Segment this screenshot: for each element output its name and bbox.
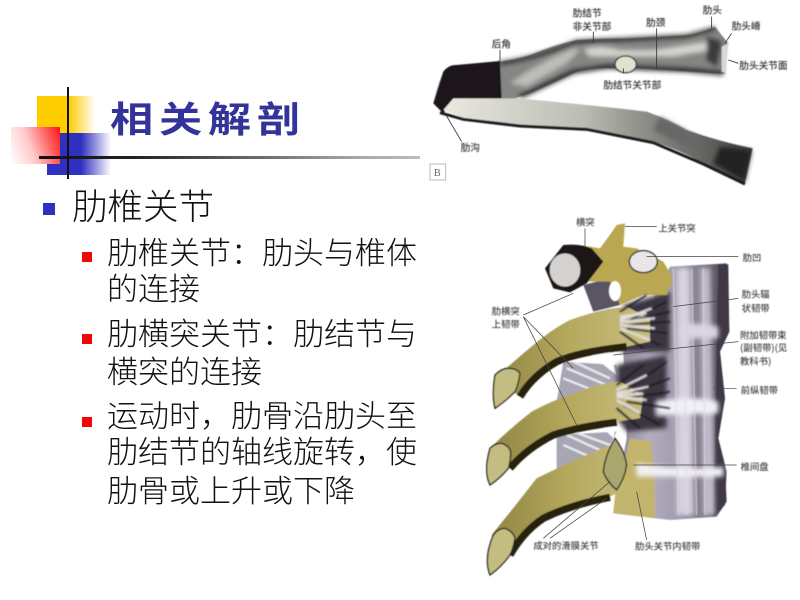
bullet list [82, 228, 417, 511]
joint labels: 前纵韧带 [741, 382, 778, 396]
rib labels: 肋头关节面 [739, 58, 788, 72]
rib 1 [495, 307, 650, 397]
rib labels: 肋颈 [646, 15, 666, 29]
vertebra yellow lower part [613, 438, 655, 518]
rib cut ends [493, 368, 520, 408]
rib labels: 肋头 [703, 2, 722, 16]
leader lines [445, 17, 738, 142]
bullet list: 肋椎关节：肋头与椎体 [107, 228, 417, 273]
joint labels: 上关节突 [658, 221, 696, 235]
joint labels: 肋凹 [743, 250, 761, 264]
joint labels: 肋横突 [492, 303, 520, 317]
bullet list: 肋骨或上升或下降 [107, 466, 355, 511]
rib 3 [492, 445, 627, 555]
joint labels: 肋头辐 [742, 287, 770, 301]
panel label B [430, 164, 446, 180]
joint labels: 肋头关节内韧带 [635, 539, 700, 553]
joint labels: 状韧带 [742, 301, 770, 315]
vertebra arch [545, 223, 673, 305]
joint labels: (副韧带)(见 [740, 340, 787, 354]
figure: rib [430, 2, 788, 184]
ligaments between ribs [557, 362, 620, 472]
rib labels: 肋结节关节部 [603, 77, 662, 91]
rib labels: 肋结节 [573, 6, 602, 20]
panel label B: B [434, 168, 441, 179]
radiate ligaments [617, 295, 670, 428]
vertebral body [613, 263, 729, 520]
joint labels [492, 215, 787, 553]
rib labels [461, 2, 788, 154]
joint labels: 横突 [576, 215, 595, 229]
rib labels: 非关节部 [573, 19, 612, 33]
rib lower part [443, 98, 753, 183]
bullet: main [43, 203, 55, 215]
bullet list: 肋横突关节：肋结节与 [107, 309, 417, 354]
leader lines [523, 227, 738, 540]
rib labels: 肋头嵴 [732, 18, 761, 32]
rib labels: 后角 [492, 37, 511, 51]
figure: costovertebral joints [487, 215, 787, 575]
bullet list: 运动时，肋骨沿肋头至 [107, 391, 417, 436]
decorative logo: coloured squares and lines [11, 87, 420, 179]
title: 相关解剖 [110, 91, 306, 143]
rib upper part [433, 27, 728, 113]
rib 2 [490, 382, 643, 468]
heading: 肋椎关节: 肋椎关节 [72, 179, 214, 230]
joint labels: 附加韧带束 [740, 327, 787, 341]
bullet list: 肋结节的轴线旋转，使 [107, 427, 417, 472]
joint labels: 椎间盘 [741, 459, 769, 473]
bullet list: 的连接 [107, 264, 200, 309]
joint labels: 上韧带 [492, 317, 520, 331]
rib labels: 肋沟 [461, 140, 480, 154]
bullet list: 横突的连接 [107, 347, 262, 392]
joint labels: 成对的滑膜关节 [533, 538, 599, 552]
dark ligament region [617, 268, 723, 515]
joint labels: 教科书) [740, 353, 771, 367]
